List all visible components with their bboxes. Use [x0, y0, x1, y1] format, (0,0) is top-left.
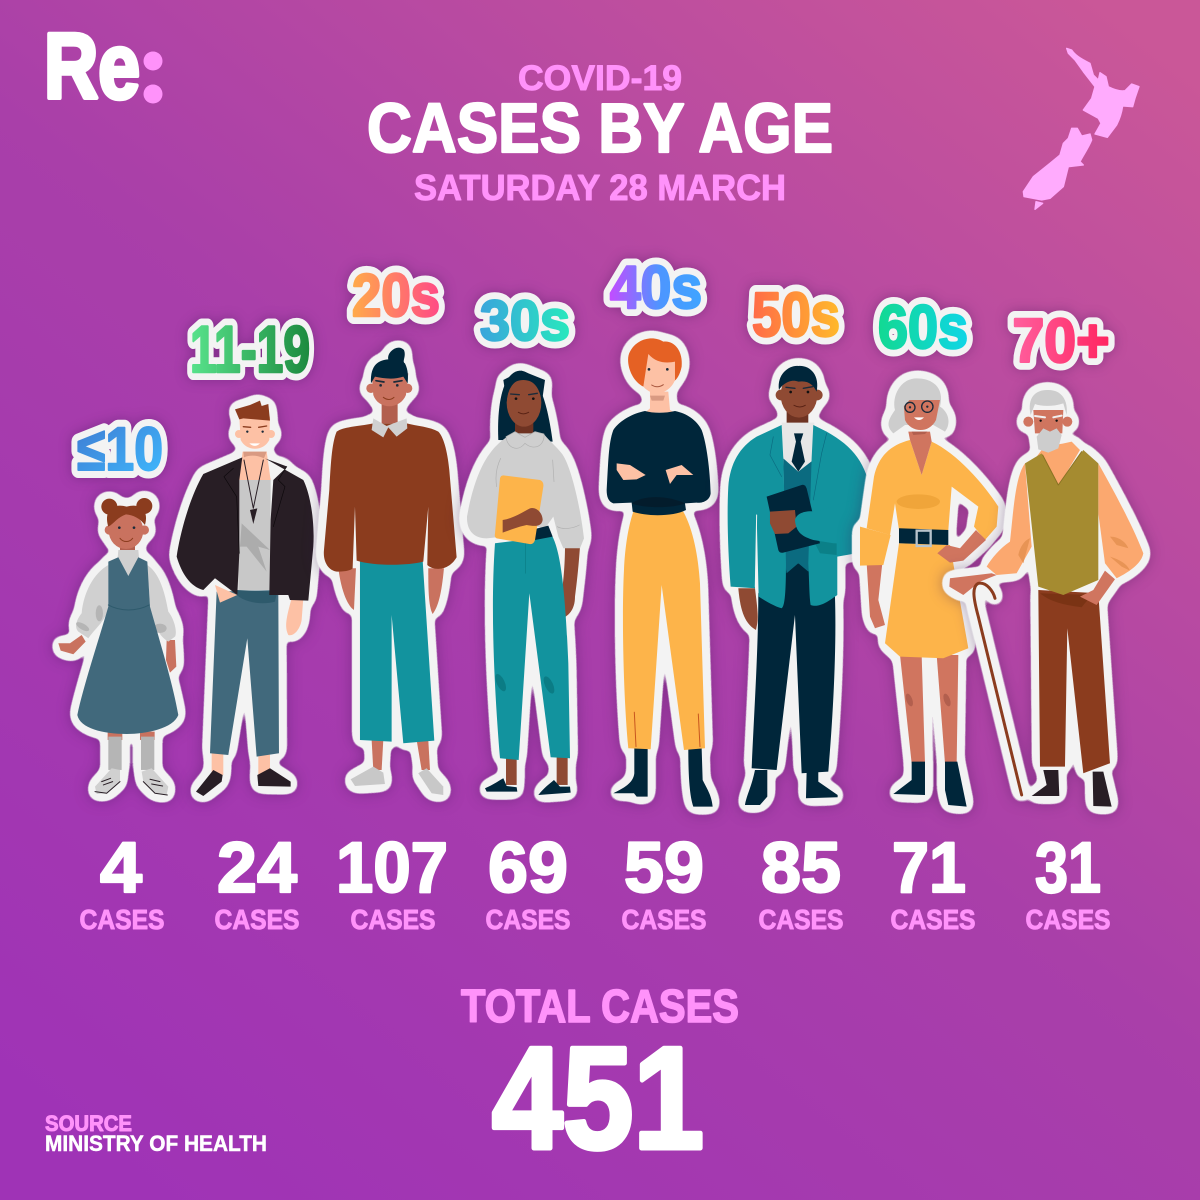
label: 60s: 60s [878, 293, 968, 361]
label: 10 and under: ≤10 [77, 415, 163, 483]
case count: 69: 69 [488, 829, 568, 908]
case count: 59: 59 [624, 829, 704, 908]
total cases: TOTAL CASES [461, 980, 739, 1032]
case count: 85 [758, 829, 844, 935]
label: 50s: 50s [752, 281, 840, 350]
case count: 4 [80, 829, 164, 935]
case count: 71: 71 [892, 829, 966, 908]
heading: title block [367, 59, 833, 208]
label: 60s: 60s [878, 293, 968, 361]
case count: 4: 4 [100, 829, 143, 908]
source [45, 1111, 267, 1156]
label: 70+: 70+ [1012, 307, 1110, 376]
case count: 59: CASES [622, 904, 706, 935]
case count: 69 [486, 829, 570, 935]
case count: 69: CASES [486, 904, 570, 935]
case count: 85: CASES [758, 904, 844, 935]
case count: 71 [890, 829, 976, 935]
label: 30s: 30s [480, 289, 570, 353]
label: 11-19: 11-19 [190, 312, 310, 386]
case count: 107: CASES [350, 904, 436, 935]
label: 10 and under: ≤10 [77, 415, 163, 483]
case count: 24: 24 [217, 829, 298, 908]
label: 20s: 20s [352, 262, 440, 329]
case count: 85: 85 [761, 829, 841, 908]
source: MINISTRY OF HEALTH [45, 1131, 267, 1156]
label: 40s: 40s [610, 254, 702, 321]
figure: man, 70 plus, with cane [949, 390, 1143, 807]
case count: 31: CASES [1026, 904, 1110, 935]
figure: woman, 40s [607, 338, 713, 807]
case count: 59 [622, 829, 706, 935]
total cases: 451 [492, 1017, 704, 1179]
figure: girl, age 10 and under [58, 498, 178, 795]
heading: title block: CASES BY AGE [367, 89, 833, 167]
label: 70+: 70+ [1012, 307, 1110, 376]
label: 40s: 40s [610, 254, 702, 321]
label: 50s: 50s [752, 281, 840, 350]
case count: 71: CASES [890, 904, 976, 935]
figure: woman, 30s [467, 371, 584, 795]
icon: New Zealand map [1023, 48, 1139, 209]
figure: woman, 60s [860, 378, 998, 807]
logo: Re:: Re [44, 14, 140, 118]
case count: 107: 107 [336, 829, 448, 908]
heading: title block: COVID-19 [518, 59, 682, 98]
case count: 24: CASES [214, 904, 300, 935]
case count: 31 [1026, 829, 1110, 935]
case count: 24 [214, 829, 300, 935]
case count: 4: CASES [80, 904, 164, 935]
heading: title block: SATURDAY 28 MARCH [414, 167, 786, 208]
label: 11-19: 11-19 [190, 312, 310, 386]
source: SOURCE [45, 1111, 132, 1136]
label: 30s: 30s [480, 289, 570, 353]
label: 20s: 20s [352, 262, 440, 329]
figure: teen, age 11-19 [177, 401, 314, 796]
figure: man, 50s [728, 366, 872, 805]
case count: 31: 31 [1035, 829, 1101, 908]
figure: adult, 20s [324, 348, 457, 795]
